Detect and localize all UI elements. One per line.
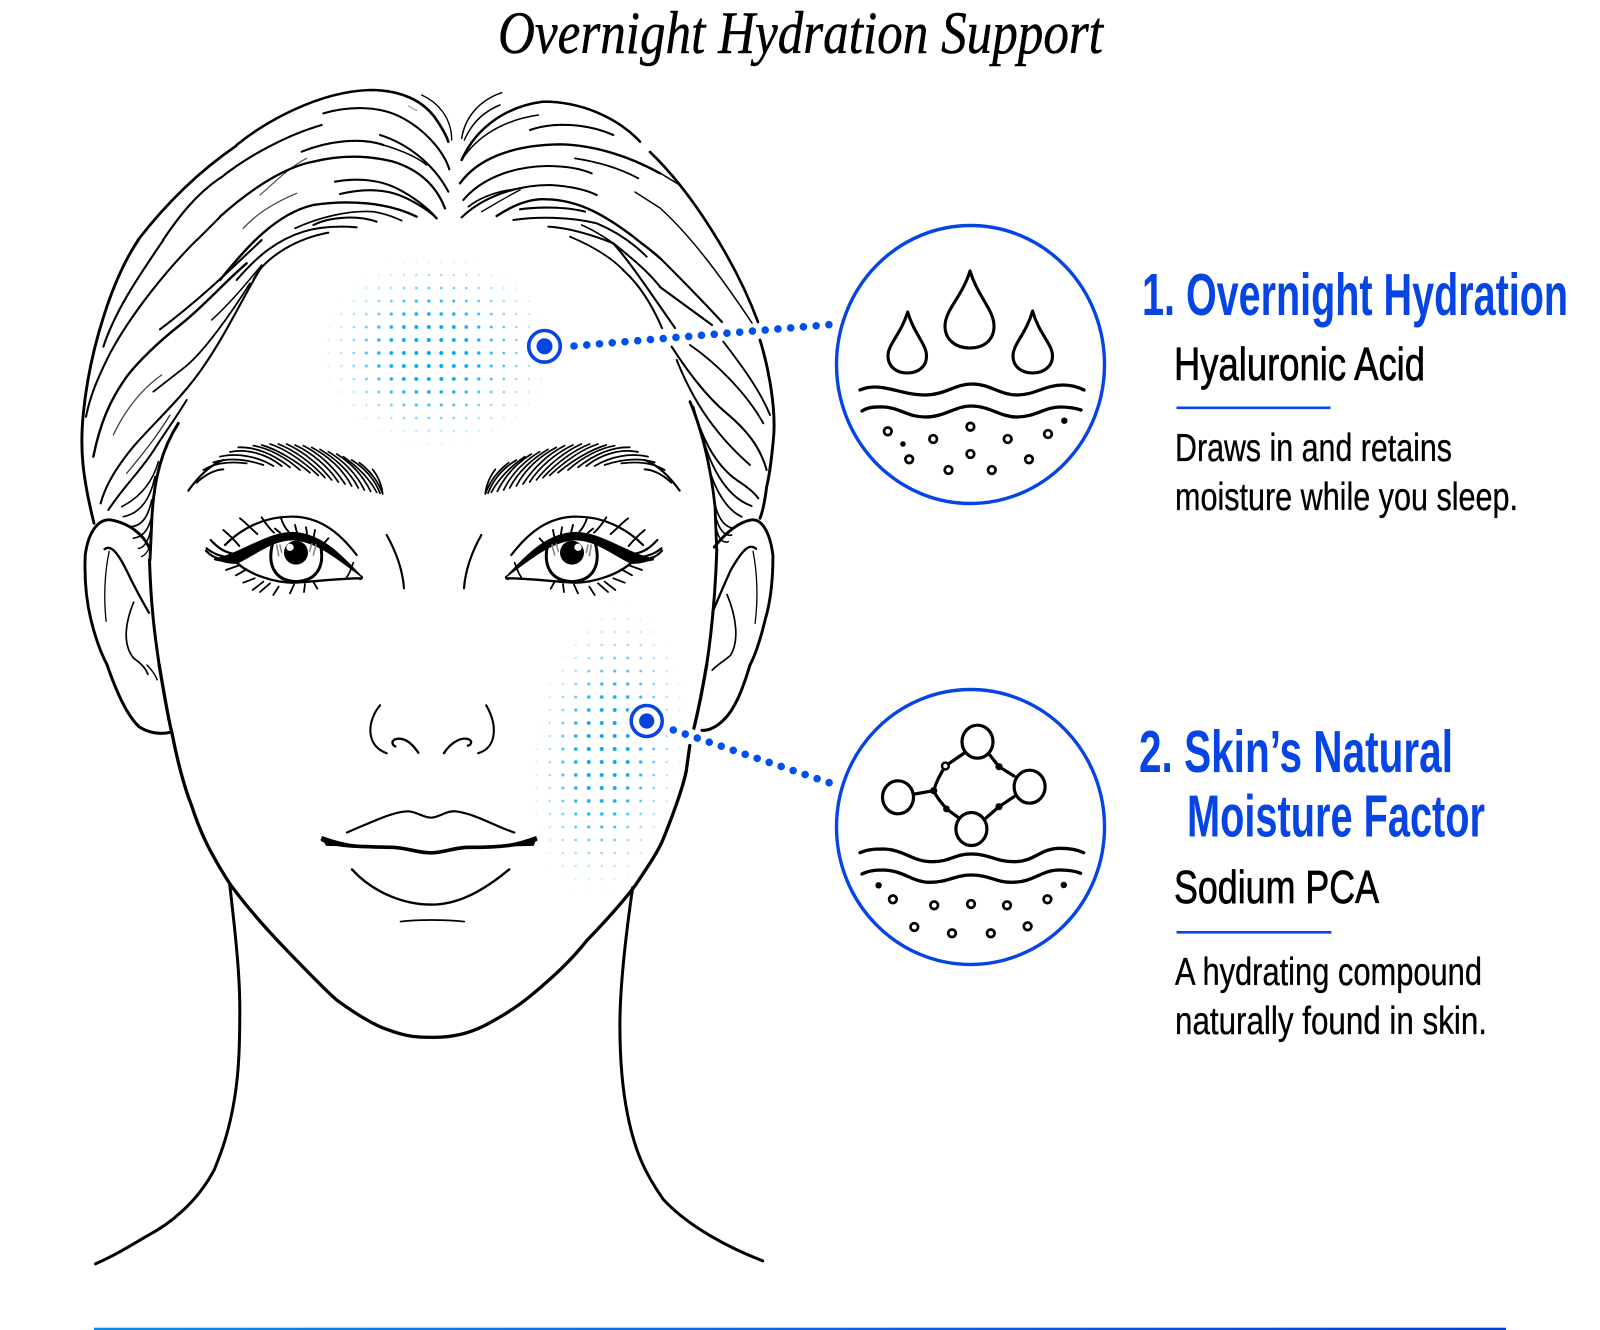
skin particles bbox=[875, 882, 1067, 937]
face and neck outline bbox=[149, 550, 717, 665]
description: A hydrating compound bbox=[1175, 951, 1482, 994]
text block: overnight hydration bbox=[1142, 262, 1568, 519]
skin waves bbox=[860, 848, 1084, 882]
divider bbox=[1176, 931, 1332, 934]
cheek halftone highlight bbox=[535, 606, 681, 893]
skin waves bbox=[860, 384, 1084, 417]
icon: water drops and skin layers bbox=[836, 226, 1104, 504]
molecule bbox=[882, 725, 1045, 846]
heading: 2. Skin’s Natural bbox=[1139, 719, 1453, 785]
right eye bbox=[464, 517, 662, 595]
description: Draws in and retains bbox=[1175, 427, 1452, 470]
face illustration bbox=[82, 90, 774, 1264]
callout line: cheek to moisture factor circle bbox=[664, 727, 830, 783]
text block: natural moisture factor: naturally found in skin. bbox=[1175, 1000, 1487, 1043]
lips bbox=[322, 811, 536, 922]
bottom rule bbox=[94, 1328, 1506, 1330]
left ear bbox=[85, 520, 149, 674]
callout line: forehead to hydration circle bbox=[566, 325, 830, 347]
right eyebrow bbox=[485, 444, 680, 494]
skin particles bbox=[884, 418, 1068, 474]
forehead marker bbox=[524, 325, 566, 367]
divider bbox=[1176, 406, 1330, 409]
right ear bbox=[712, 520, 773, 670]
title: Overnight Hydration Support bbox=[498, 0, 1104, 66]
hair side links bbox=[138, 146, 758, 328]
cheek marker bbox=[626, 700, 668, 742]
drops bbox=[888, 271, 1052, 373]
left eyebrow bbox=[188, 444, 383, 494]
hair right side bbox=[672, 340, 774, 550]
nose bbox=[370, 705, 494, 753]
left eye bbox=[206, 517, 404, 595]
icon: molecule and skin layers bbox=[836, 690, 1104, 964]
forehead halftone highlight bbox=[328, 260, 554, 445]
ingredient name: Hyaluronic Acid bbox=[1174, 338, 1425, 390]
text block: natural moisture factor bbox=[1139, 719, 1487, 1043]
hair top strands bbox=[220, 90, 660, 287]
hair left side bbox=[82, 240, 262, 560]
ingredient name: Sodium PCA bbox=[1174, 861, 1379, 913]
text block: overnight hydration: moisture while you sleep. bbox=[1175, 476, 1518, 519]
